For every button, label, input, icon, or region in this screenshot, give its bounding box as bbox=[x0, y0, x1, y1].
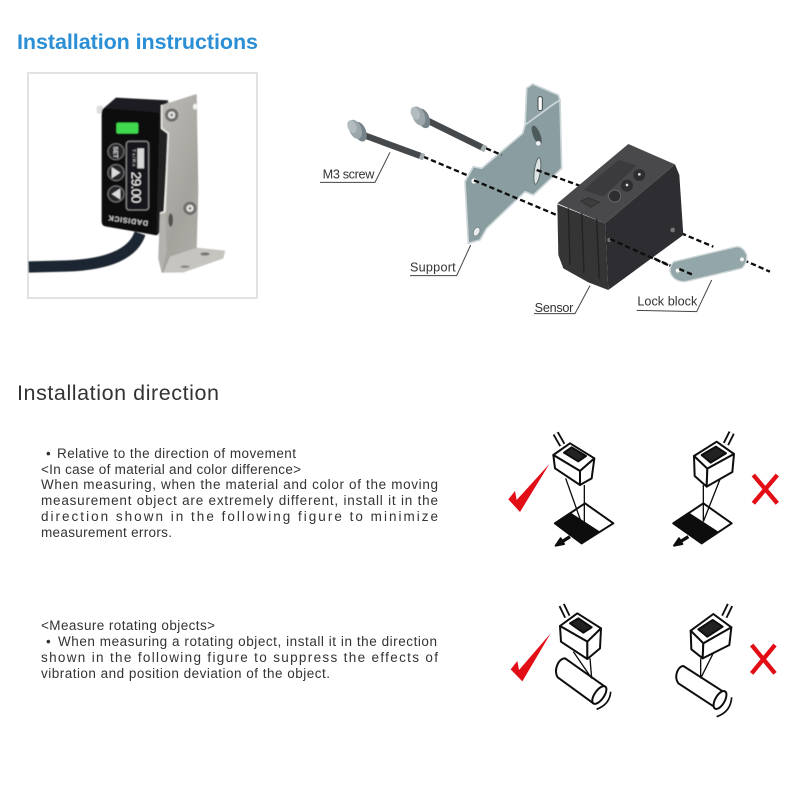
icon: lock block bbox=[670, 247, 747, 282]
label: lock block bbox=[637, 280, 712, 312]
icon: sensor body: DADISICK bbox=[107, 213, 149, 228]
text block: movement direction: • bbox=[46, 446, 51, 461]
icon: sensor over black and white target bbox=[553, 433, 613, 546]
text block: rotating objects bbox=[41, 618, 438, 681]
text block: rotating objects: • bbox=[46, 634, 51, 649]
icon: sensor over target, wrong orientation bbox=[673, 433, 734, 546]
figure: movement correct bbox=[508, 433, 613, 546]
text block: movement direction: <In case of material and color difference> bbox=[41, 462, 301, 477]
icon: support bracket bbox=[465, 84, 562, 243]
label: support bbox=[410, 245, 471, 276]
icon: red check mark bbox=[511, 633, 551, 681]
icon: sensor body bbox=[102, 98, 168, 236]
panel: product photo bbox=[28, 73, 257, 298]
text block: movement direction bbox=[41, 446, 438, 540]
sensor rear pin bbox=[97, 106, 103, 114]
text block: movement direction: direction shown in the following figure to minimize bbox=[41, 509, 438, 524]
icon: red cross bbox=[752, 645, 775, 673]
icon: sensor cable bbox=[29, 233, 140, 267]
label: M3 screw: M3 screw bbox=[323, 168, 375, 182]
text block: rotating objects: When measuring a rotating object, install it in the direction bbox=[58, 634, 437, 649]
text block: rotating objects: vibration and position deviation of the object. bbox=[41, 666, 330, 681]
text block: movement direction: Relative to the direction of movement bbox=[57, 446, 296, 461]
text block: movement direction: When measuring, when the material and color of the moving bbox=[41, 477, 438, 492]
icon: red cross bbox=[753, 475, 777, 503]
artwork group bbox=[345, 84, 770, 290]
text block: movement direction: measurement object are extremely different, install it in the bbox=[41, 493, 438, 508]
heading: installation instructions: Installation instructions bbox=[17, 30, 258, 54]
figure: rotating correct bbox=[511, 605, 611, 709]
text block: rotating objects: <Measure rotating objects> bbox=[41, 618, 215, 633]
icon: sensor body: 29.00 bbox=[129, 172, 145, 204]
heading: installation direction: Installation direction bbox=[17, 381, 219, 405]
label: lock block: Lock block bbox=[637, 294, 698, 308]
dashed axis lines bbox=[423, 148, 770, 275]
figure: movement incorrect bbox=[673, 433, 777, 546]
icon: sensor over cylinder, wrong orientation bbox=[676, 605, 732, 717]
icon: screw two bbox=[409, 104, 486, 149]
text block: rotating objects: shown in the following figure to suppress the effects of bbox=[41, 650, 438, 665]
icon: sensor housing bbox=[557, 144, 683, 290]
icon: sensor body: Tx/Rx bbox=[131, 149, 137, 167]
icon: sensor body: SET bbox=[112, 146, 118, 158]
label: sensor bbox=[534, 286, 590, 315]
icon: screw one bbox=[345, 118, 424, 157]
label: sensor: Sensor bbox=[535, 301, 573, 315]
text block: movement direction: measurement errors. bbox=[41, 525, 172, 540]
icon: sensor over cylinder bbox=[556, 605, 611, 709]
panel: exploded assembly diagram bbox=[320, 84, 770, 315]
figure: rotating incorrect bbox=[676, 605, 775, 717]
icon: metal bracket bbox=[158, 94, 225, 273]
icon: red check mark bbox=[508, 464, 549, 512]
label: M3 screw bbox=[320, 152, 390, 182]
label: support: Support bbox=[410, 260, 456, 274]
